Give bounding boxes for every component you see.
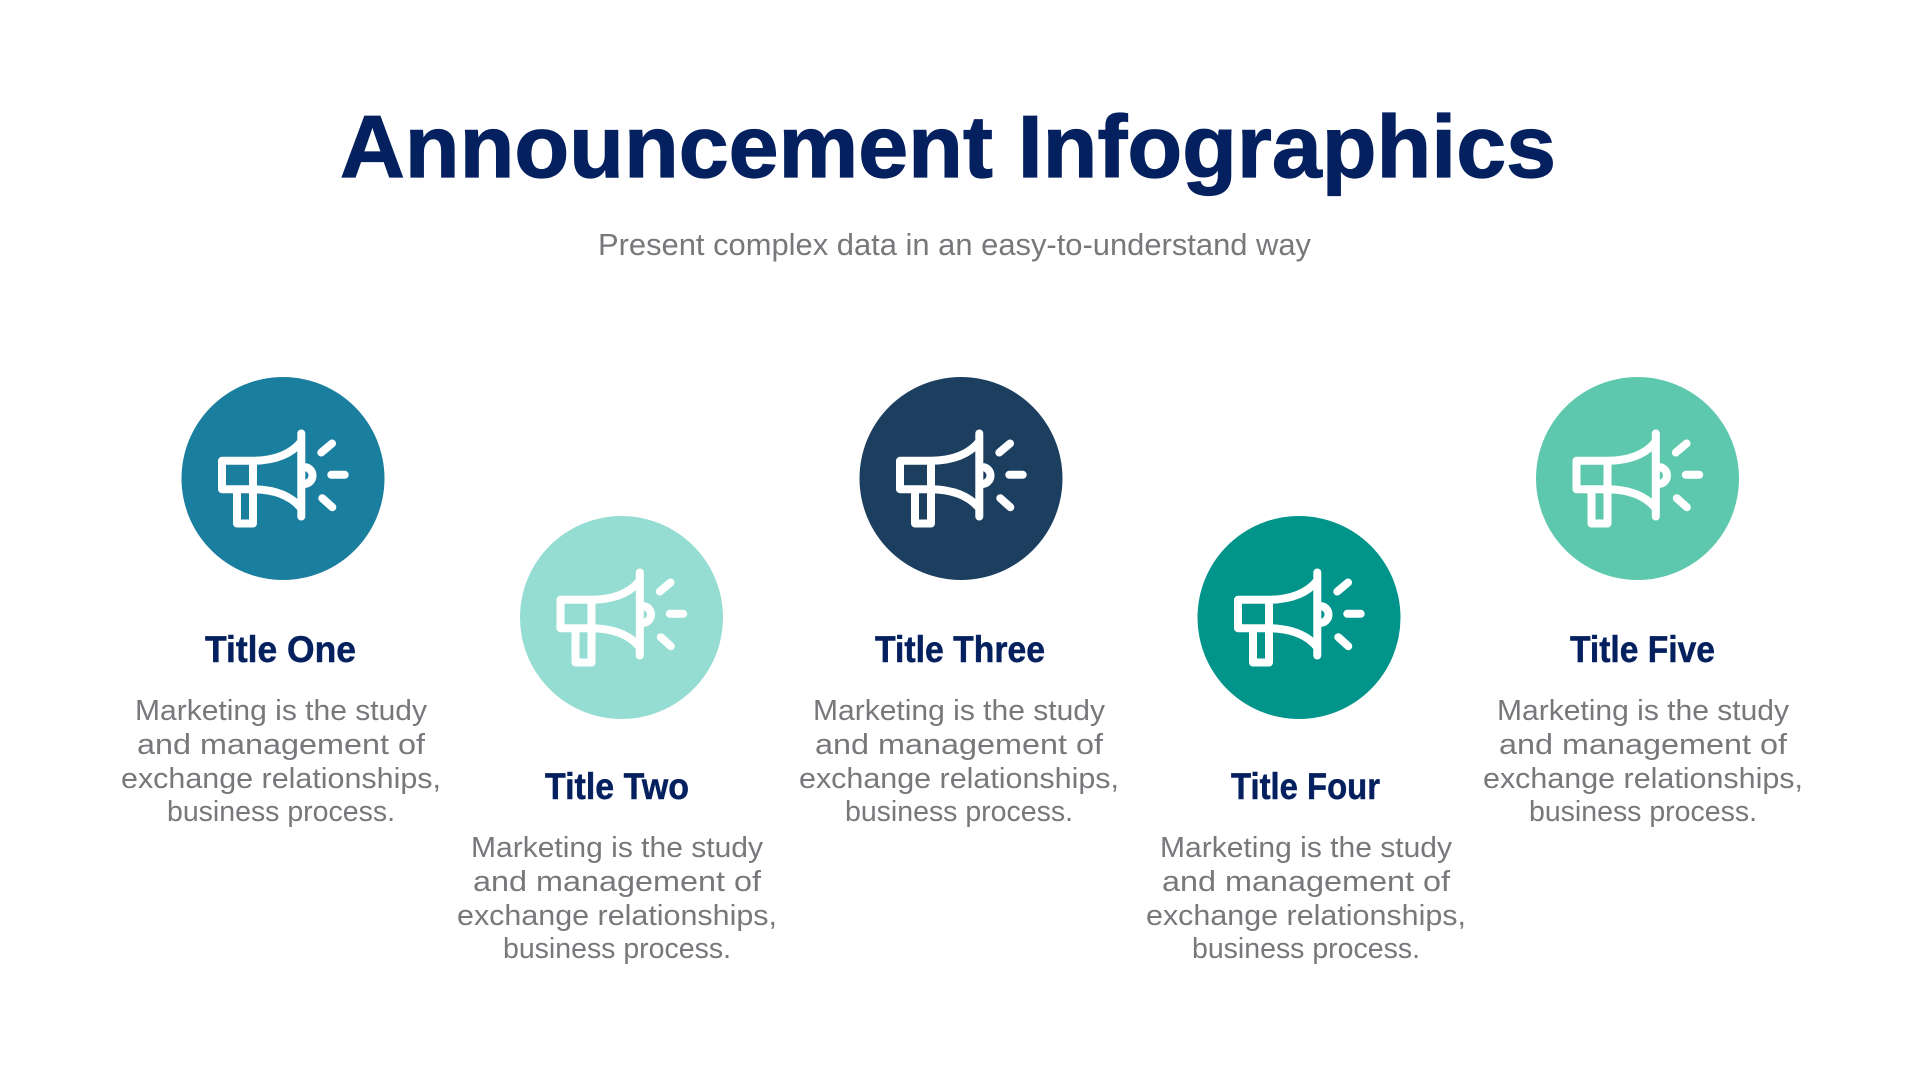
icon: megaphone in light aqua circle	[520, 516, 723, 719]
panel: title four	[1146, 516, 1466, 965]
icon: megaphone in mint circle	[1536, 377, 1739, 580]
panel: title one	[121, 377, 441, 828]
text block: description four: and management of	[1162, 866, 1451, 898]
text block: description one: Marketing is the study	[135, 695, 428, 727]
text block: description three: Marketing is the study	[813, 695, 1106, 727]
text block: description one: exchange relationships,	[121, 763, 441, 795]
heading: title three: Title Three	[875, 629, 1045, 670]
heading: title one: Title One	[205, 629, 356, 670]
text block: description two	[457, 832, 777, 965]
text block: description two: Marketing is the study	[471, 832, 764, 864]
text block: description one: business process.	[167, 796, 395, 828]
heading: title four: Title Four	[1231, 766, 1380, 807]
text block: description four	[1146, 832, 1466, 965]
text block: description one: and management of	[137, 729, 426, 761]
icon: megaphone in teal circle	[1198, 516, 1400, 719]
heading: title two: Title Two	[545, 766, 689, 807]
text block: description two: exchange relationships,	[457, 900, 777, 932]
icon: megaphone in navy circle	[860, 377, 1062, 580]
text block: description three	[799, 695, 1119, 828]
text block: description three: and management of	[815, 729, 1104, 761]
text block: description five: exchange relationships,	[1483, 763, 1803, 795]
icon: megaphone in teal-blue circle	[182, 377, 384, 580]
text block: description four: exchange relationships,	[1146, 900, 1466, 932]
text block: description five: Marketing is the study	[1497, 695, 1790, 727]
subtitle: Present complex data in an easy-to-understand way	[598, 227, 1311, 262]
text block: description five: business process.	[1529, 796, 1757, 828]
text block: description one	[121, 695, 441, 828]
panel: title five	[1483, 377, 1803, 828]
heading: title five: Title Five	[1570, 629, 1715, 670]
panel: title two	[457, 516, 777, 965]
text block: description four: Marketing is the study	[1160, 832, 1453, 864]
panel: title three	[799, 377, 1119, 828]
text block: description three: exchange relationships,	[799, 763, 1119, 795]
text block: description five: and management of	[1499, 729, 1788, 761]
text block: description five	[1483, 695, 1803, 828]
text block: description four: business process.	[1192, 933, 1420, 965]
text block: description two: and management of	[473, 866, 762, 898]
text block: description two: business process.	[503, 933, 731, 965]
title: Announcement Infographics	[340, 97, 1556, 196]
text block: description three: business process.	[845, 796, 1073, 828]
